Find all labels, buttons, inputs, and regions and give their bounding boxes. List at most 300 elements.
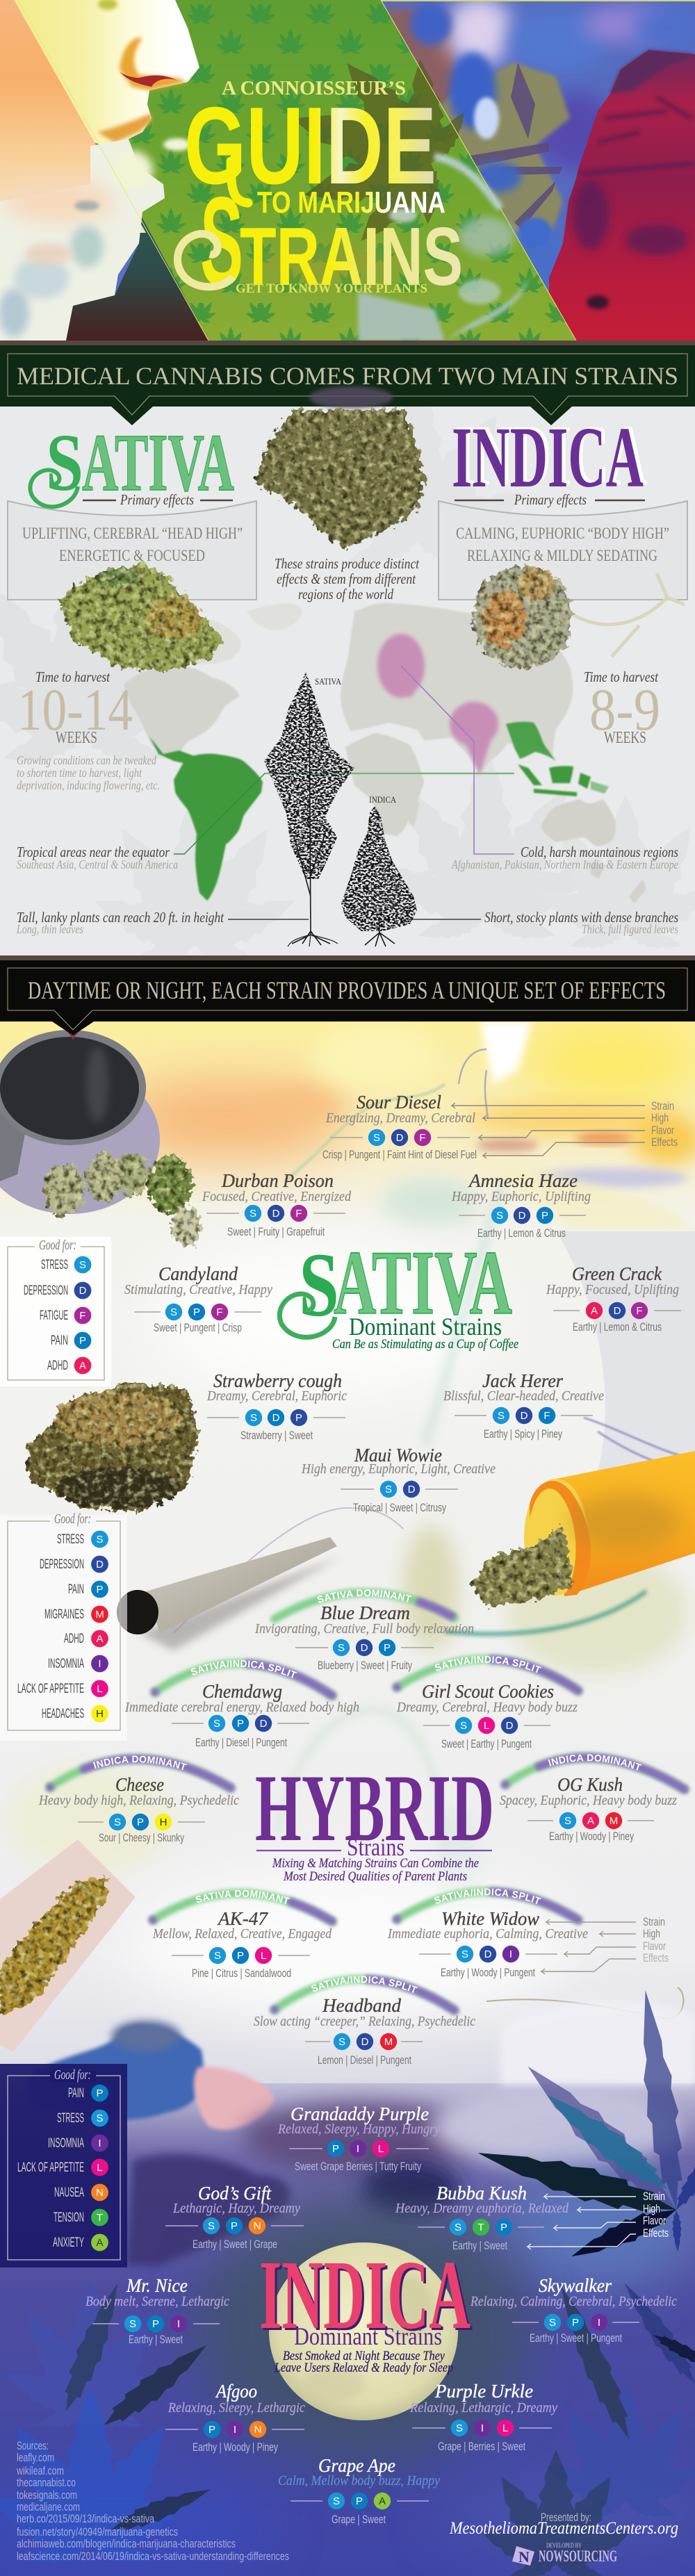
strain: Girl Scout Cookies: S (460, 1720, 467, 1732)
strain: Durban Poison: D (272, 1208, 280, 1220)
strain: AK-47: L (261, 1950, 266, 1962)
strain: Cheese: H (160, 1816, 167, 1828)
stat: indica time to harvest: 8-9 (589, 676, 660, 743)
key: indica good for: Good for: (54, 2067, 91, 2083)
strain: Grape Ape (278, 2455, 440, 2526)
strain: AK-47: AK-47 (217, 1908, 269, 1929)
map region: sativa green areas (149, 722, 609, 901)
photo: coffee cup with buds (0, 1030, 202, 1246)
strain: Blue Dream: S (338, 1642, 345, 1654)
strain: Headband: Lemon | Diesel | Pungent (318, 2053, 411, 2067)
text: growing conditions note: to shorten time to harvest, light (17, 766, 142, 780)
key: hybrid good for: STRESS (57, 1532, 84, 1547)
text: sources: fusion.net/story/40949/marijuana-genetics (17, 2525, 178, 2538)
stat: sativa time to harvest: WEEKS (56, 729, 97, 747)
strain: AK-47: S (214, 1950, 221, 1962)
logo: NowSourcing: DEVELOPED BY (546, 2542, 582, 2549)
key: sativa good for: Good for: (39, 1238, 76, 1253)
key: sativa good for: S (79, 1259, 86, 1271)
key: hybrid good for: HEADACHES (42, 1707, 84, 1721)
badge arc: sativa/indica split: SATIVA/INDICA SPLIT (190, 1660, 297, 1678)
strain: Grape Ape: P (356, 2495, 363, 2507)
strain: Bubba Kush: Earthy | Sweet (452, 2239, 507, 2252)
strain: Candyland (124, 1263, 272, 1334)
strain: Maui Wowie (301, 1445, 496, 1514)
label: sativa tree: SATIVA (315, 676, 342, 687)
strain: OG Kush: Earthy | Woody | Piney (549, 1830, 634, 1843)
strain: Purple Urkle: L (502, 2422, 508, 2434)
key: sativa good for: D (79, 1285, 87, 1297)
strain: AK-47: Mellow, Relaxed, Creative, Engaged (152, 1926, 332, 1942)
heading: hybrid strains: Mixing & Matching Strains Can Combine the (272, 1856, 479, 1871)
key: hybrid good for: H (96, 1708, 104, 1720)
strain: Headband: S (338, 2036, 345, 2048)
strain: Bubba Kush: Heavy, Dreamy euphoria, Relaxed (395, 2201, 569, 2216)
strain: Amnesia Haze: D (518, 1210, 526, 1222)
strain: Durban Poison: S (250, 1208, 256, 1220)
badge arc: sativa dominant (146, 1886, 339, 1929)
strain: Amnesia Haze: S (496, 1210, 503, 1222)
strain: Maui Wowie: High energy, Euphoric, Light, Creative (301, 1461, 496, 1477)
key: hybrid good for: Good for: (54, 1511, 91, 1527)
strain: God's Gift: P (231, 2220, 238, 2232)
key: indica good for: A (96, 2237, 104, 2249)
strain: Purple Urkle (409, 2381, 557, 2453)
key: sativa good for: FATIGUE (40, 1308, 68, 1323)
badge arc: sativa dominant: SATIVA DOMINANT (196, 1890, 290, 1904)
strain: OG Kush: A (587, 1815, 594, 1827)
photo: sativa bud (59, 563, 224, 671)
strain: Skywalker (470, 2275, 677, 2345)
strain: Green Crack: A (591, 1305, 598, 1317)
callout: sativa plant size (16, 909, 224, 936)
text: sources: thecannabist.co (17, 2476, 76, 2489)
strain: Strawberry cough: D (272, 1412, 280, 1424)
panel: indica primary effects: Primary effects (514, 491, 587, 508)
strain: Afgoo: I (234, 2424, 236, 2436)
callout: indica plant size (484, 909, 678, 936)
text: sources: herb.co/2015/09/13/indica-vs-sativa (17, 2512, 154, 2525)
strain: White Widow: Earthy | Woody | Pungent (441, 1966, 535, 1979)
panel: sativa primary effects (8, 491, 256, 600)
strain: Candyland: Sweet | Pungent | Crisp (154, 1321, 242, 1334)
strain: Maui Wowie: Tropical | Sweet | Citrusy (353, 1501, 446, 1514)
key: sativa good for: P (79, 1335, 86, 1347)
key: hybrid good for: P (96, 1584, 104, 1595)
strain: Blue Dream: Blue Dream (320, 1602, 410, 1623)
strain: Cheese: Cheese (115, 1774, 164, 1795)
key: indica good for: TENSION (54, 2210, 84, 2225)
credits: presented by (449, 2511, 678, 2538)
legend: hybrid strain key: High (643, 1927, 660, 1940)
text: sources: wikileaf.com (16, 2464, 64, 2477)
strain: Mr. Nice: Mr. Nice (126, 2275, 188, 2296)
text: sources: medicaljane.com (17, 2500, 80, 2513)
key: indica good for: L (97, 2162, 103, 2174)
hero title: A CONNOISSEUR’S (222, 77, 406, 99)
legend: indica strain key: Strain (643, 2190, 665, 2203)
key: hybrid good for: D (96, 1559, 104, 1570)
strain: Skywalker: Earthy | Sweet | Pungent (530, 2331, 622, 2345)
illustration: full moon (269, 2242, 458, 2420)
strain: OG Kush: M (610, 1815, 618, 1827)
strain: Candyland: Stimulating, Creative, Happy (124, 1282, 272, 1297)
strain: Chemdawg: D (260, 1718, 268, 1730)
strain: Sour Diesel: Crisp | Pungent | Faint Hint of Diesel Fuel (322, 1148, 477, 1161)
panel: sativa primary effects: UPLIFTING, CEREBRAL “HEAD HIGH” (22, 525, 243, 542)
badge arc: sativa/indica split (389, 1885, 585, 1928)
strain: Green Crack (546, 1263, 681, 1334)
label: indica tree: INDICA (369, 794, 397, 805)
strain: Chemdawg: Chemdawg (202, 1681, 282, 1702)
key: hybrid good for: M (95, 1609, 104, 1621)
strain: OG Kush: Spacey, Euphoric, Heavy body buzz (500, 1793, 677, 1808)
key: hybrid good for: MIGRAINES (44, 1607, 84, 1622)
text: sources: alchimiaweb.com/blogen/indica-marijuana-characteristics (17, 2537, 236, 2550)
strain: Strawberry cough (206, 1370, 347, 1442)
strain: Candyland: P (193, 1306, 200, 1318)
badge arc: sativa/indica split (147, 1657, 339, 1703)
strain: Grandaddy Purple: Sweet Grape Berries | Tutty Fruity (295, 2160, 421, 2173)
strain: White Widow: I (509, 1949, 512, 1960)
strain: White Widow: Immediate euphoria, Calming, Creative (387, 1926, 588, 1942)
strain: Jack Herer: S (498, 1410, 505, 1422)
strain: Maui Wowie: Maui Wowie (354, 1445, 442, 1466)
key: hybrid good for: LACK OF APPETITE (17, 1682, 84, 1696)
strain: Girl Scout Cookies: L (484, 1720, 489, 1732)
strain: Grandaddy Purple (277, 2103, 440, 2173)
key: indica good for: S (96, 2113, 104, 2124)
strain: Amnesia Haze: Earthy | Lemon & Citrus (477, 1227, 566, 1240)
strain: Sour Diesel (322, 1092, 477, 1161)
heading: sativa dominant strains: Dominant Strains (349, 1313, 502, 1340)
strain: Amnesia Haze (451, 1170, 591, 1240)
strain: Cheese: Heavy body high, Relaxing, Psychedelic (38, 1793, 239, 1808)
strain: Purple Urkle: Grape | Berries | Sweet (438, 2440, 525, 2453)
strain: Strawberry cough: S (250, 1412, 257, 1424)
strain: Durban Poison: Durban Poison (221, 1170, 334, 1191)
strain: Durban Poison: F (295, 1208, 302, 1220)
panel: sativa primary effects: Primary effects (120, 491, 194, 508)
strain: Purple Urkle: S (456, 2422, 463, 2434)
strain: Girl Scout Cookies: Dreamy, Cerebral, Heavy body buzz (396, 1700, 578, 1715)
photo: rolling paper with ground cannabis (0, 1839, 136, 2052)
text: growing conditions note: deprivation, inducing flowering, etc. (17, 778, 160, 792)
strain: Cheese (38, 1751, 239, 1844)
strain: Candyland: S (170, 1306, 177, 1318)
strain: Sour Diesel: Energizing, Dreamy, Cerebral (325, 1110, 475, 1126)
strain: White Widow: White Widow (441, 1908, 539, 1929)
strain: God's Gift: S (208, 2220, 215, 2232)
connector lines from map regions (174, 666, 514, 919)
strain: Maui Wowie: S (385, 1484, 392, 1495)
key: indica good for: N (96, 2187, 104, 2199)
heading: hybrid strains: Strains (347, 1833, 404, 1861)
strain: Grandaddy Purple: P (332, 2143, 339, 2155)
logo: NowSourcing: N (518, 2548, 530, 2566)
strain: Headband: M (384, 2036, 393, 2048)
text: growing conditions note: Growing conditions can be tweaked (17, 753, 157, 767)
strain: White Widow: D (484, 1949, 492, 1960)
badge arc: sativa/indica split (267, 1972, 461, 2018)
key: sativa good for: F (79, 1310, 86, 1322)
strain: Purple Urkle: I (481, 2422, 484, 2434)
key: indica good for: PAIN (68, 2086, 84, 2101)
banner: daytime or night effects (0, 955, 695, 1035)
heading: sativa dominant strains: S (299, 1233, 339, 1336)
strain: Strawberry cough: Dreamy, Cerebral, Euphoric (206, 1388, 347, 1404)
strain: AK-47 (146, 1886, 339, 1980)
callout: sativa plant size: Tall, lanky plants can reach 20 ft. in height (17, 909, 224, 926)
strain: Blue Dream: P (384, 1642, 391, 1654)
strain: Headband (254, 1972, 475, 2067)
text: sources: tokesignals.com (17, 2488, 77, 2502)
strain: Mr. Nice: P (152, 2318, 159, 2330)
decorative cannabis leaves (0, 1988, 695, 2576)
strain: AK-47: P (237, 1950, 244, 1962)
badge arc: sativa/indica split: SATIVA/INDICA SPLIT (434, 1889, 541, 1904)
photo: strawberry cough bud (28, 1381, 198, 1511)
strain: Strawberry cough: Strawberry | Sweet (240, 1429, 313, 1442)
strain: White Widow (387, 1885, 588, 1979)
key: indica good for: I (98, 2138, 101, 2149)
key: indica good for: P (96, 2087, 104, 2099)
text: sources (16, 2439, 289, 2563)
key: indica good for: T (97, 2212, 103, 2224)
heading: sativa: ATIVA (82, 417, 234, 508)
strain: Candyland: F (216, 1306, 223, 1318)
banner: medical cannabis comes from two main strains: MEDICAL CANNABIS COMES FROM TWO MAIN STRAINS (17, 362, 678, 390)
strain: Sour Diesel: S (373, 1132, 380, 1144)
legend: sativa strain key: Flavor (651, 1124, 674, 1137)
text: sources: leafly.com (17, 2451, 54, 2464)
background: indica night scene (0, 1988, 695, 2576)
legend: indica strain key: Flavor (643, 2214, 666, 2227)
strain: Mr. Nice: S (129, 2318, 136, 2330)
hero title (178, 77, 463, 312)
legend: sativa strain key (452, 1099, 678, 1158)
strain: Grape Ape: Grape | Sweet (332, 2513, 386, 2526)
heading: hybrid strains: Most Desired Qualities of Parent Plants (283, 1869, 467, 1884)
heading: indica dominant strains: Leave Users Relaxed & Ready for Sleep (274, 2361, 453, 2375)
strain: OG Kush: OG Kush (557, 1774, 623, 1795)
strain: Grape Ape: Calm, Mellow body buzz, Happy (278, 2473, 440, 2488)
strain: God's Gift: N (254, 2220, 261, 2232)
strain: Skywalker: P (572, 2317, 579, 2329)
text: strains intro: effects & stem from different (277, 571, 416, 587)
badge arc: indica dominant (43, 1751, 238, 1796)
key: sativa good for: ADHD (47, 1359, 68, 1373)
key: indica good for: NAUSEA (54, 2185, 84, 2200)
strain: Grandaddy Purple: I (357, 2143, 359, 2155)
strain: God's Gift: Earthy | Sweet | Grape (193, 2238, 277, 2251)
badge arc: sativa/indica split: SATIVA/INDICA SPLIT (311, 1976, 418, 1993)
text: growing conditions note (17, 753, 160, 792)
spilled buds (471, 1525, 573, 1607)
strain: Jack Herer: Jack Herer (482, 1370, 563, 1391)
strain: Jack Herer: Blissful, Clear-headed, Creative (443, 1388, 604, 1404)
hero title: TRAINS (240, 211, 463, 303)
strain: Afgoo (165, 2381, 305, 2454)
badge arc: indica dominant (498, 1750, 692, 1797)
key: sativa good for: DEPRESSION (24, 1283, 68, 1298)
legend: sativa strain key: Strain (651, 1099, 674, 1113)
heading: indica dominant strains: Dominant Strains (294, 2322, 442, 2350)
strain: Chemdawg (124, 1657, 359, 1749)
key: indica good for: INSOMNIA (48, 2136, 84, 2151)
legend: indica strain key (528, 2190, 669, 2249)
text: sources: Sources: (17, 2439, 49, 2452)
strain: Grandaddy Purple: Relaxed, Sleepy, Happy, Hungry (277, 2122, 440, 2137)
world map (124, 603, 646, 903)
photo: rolled joint (117, 1537, 341, 1650)
photo: pill bottle with spilled buds (471, 1451, 695, 1607)
strain: Strawberry cough: Strawberry cough (213, 1370, 342, 1391)
legend: indica strain key: Effects (643, 2226, 669, 2240)
badge arc: indica dominant: INDICA DOMINANT (93, 1755, 187, 1771)
strain: Chemdawg: S (213, 1718, 220, 1730)
panel: two main strains section background (0, 374, 695, 972)
strain: Green Crack: Happy, Focused, Uplifting (546, 1282, 679, 1297)
strain: Headband: D (361, 2036, 369, 2048)
strain: Skywalker: Skywalker (539, 2275, 612, 2296)
strain: Cheese: S (114, 1816, 121, 1828)
strain: Sour Diesel: D (396, 1132, 404, 1144)
hero title: S (200, 170, 243, 312)
hero green diagonal band (18, 0, 576, 341)
strain: Girl Scout Cookies: Sweet | Earthy | Pungent (441, 1737, 532, 1750)
heading: indica dominant strains: Best Smoked at Night Because They (283, 2349, 445, 2363)
strain: Afgoo: P (208, 2424, 215, 2436)
stat: indica time to harvest: Time to harvest (584, 668, 659, 685)
key: hybrid good for (0, 1511, 127, 1741)
strain: Mr. Nice: Earthy | Sweet (129, 2333, 183, 2346)
heading: sativa dominant strains: Can Be as Stimulating as a Cup of Coffee (332, 1337, 518, 1352)
sativa tree illustration (264, 672, 354, 946)
strain: Blue Dream: Invigorating, Creative, Full body relaxation (254, 1621, 474, 1636)
heading: hybrid strains (255, 1755, 494, 1884)
hero diagonal edges (18, 0, 576, 341)
strain: Purple Urkle: Relaxing, Lethargic, Dreamy (409, 2400, 557, 2415)
strain: Grandaddy Purple: L (378, 2143, 384, 2155)
strain: Chemdawg: Earthy | Diesel | Pungent (195, 1736, 287, 1749)
key: hybrid good for: DEPRESSION (40, 1557, 84, 1572)
legend: hybrid strain key: Effects (643, 1951, 669, 1964)
strain: Girl Scout Cookies: D (506, 1720, 514, 1732)
hero title: GUIDE (184, 85, 436, 207)
strain: Grandaddy Purple: Grandaddy Purple (291, 2103, 429, 2124)
strain: Mr. Nice: Body melt, Serene, Lethargic (85, 2294, 229, 2309)
logo: NowSourcing: NOWSOURCING (539, 2548, 617, 2565)
strain: Jack Herer: F (543, 1410, 550, 1422)
heading: sativa dominant strains (279, 1231, 518, 1352)
key: hybrid good for: I (98, 1658, 101, 1670)
badge arc: sativa dominant (268, 1586, 461, 1626)
coffee cup buds (43, 1152, 202, 1246)
legend: hybrid strain key: Strain (643, 1915, 665, 1928)
strain: White Widow: S (461, 1949, 468, 1960)
credits: presented by: Presented by: (541, 2511, 591, 2524)
text: sources: leafscience.com/2014/06/19/indica-vs-sativa-understanding-differences (17, 2550, 289, 2563)
strain: Bubba Kush: S (455, 2222, 461, 2233)
key: indica good for: LACK OF APPETITE (17, 2160, 84, 2175)
heading: sativa: S (46, 417, 83, 508)
strain: Bubba Kush (395, 2183, 569, 2252)
legend: indica strain key: High (643, 2202, 660, 2215)
photo: center cannabis buds (256, 410, 425, 550)
strain: Jack Herer: D (521, 1410, 528, 1422)
strain: Green Crack: Green Crack (572, 1263, 662, 1284)
strain: Afgoo: Relaxing, Sleepy, Lethargic (167, 2400, 305, 2415)
strain: God's Gift: God’s Gift (198, 2183, 272, 2204)
strain: Durban Poison: Sweet | Fruity | Grapefruit (227, 1225, 325, 1238)
strain: Headband: Slow acting “creeper,” Relaxing, Psychedelic (254, 2014, 475, 2029)
text: strains intro: regions of the world (298, 586, 393, 602)
text: strains intro (275, 555, 420, 602)
badge arc: sativa/indica split (389, 1652, 585, 1698)
strain: Grape Ape: Grape Ape (318, 2455, 395, 2476)
strain: Jack Herer (443, 1370, 604, 1441)
hero beard shadow (66, 212, 208, 341)
panel: hero banner (0, 0, 695, 341)
hero title: TO MARIJUANA (257, 186, 445, 220)
strain: Sour Diesel: Sour Diesel (357, 1092, 441, 1113)
strain: Afgoo: Earthy | Woody | Piney (193, 2440, 278, 2454)
heading: hybrid strains: HYBRID (255, 1755, 494, 1861)
key: hybrid good for: L (97, 1683, 103, 1695)
panel: sativa primary effects: ENERGETIC & FOCUSED (59, 547, 205, 564)
strain: God's Gift (165, 2183, 304, 2251)
strain: Green Crack: F (636, 1305, 643, 1317)
key: hybrid good for: A (96, 1633, 104, 1645)
hero photo: exhaled smoke (0, 138, 191, 341)
strain: Cheese: Sour | Cheesy | Skunky (99, 1831, 184, 1844)
legend: sativa strain key: High (651, 1111, 669, 1124)
strain: Girl Scout Cookies (389, 1652, 585, 1750)
strain: Girl Scout Cookies: Girl Scout Cookies (422, 1681, 554, 1702)
callout: mountainous regions (451, 844, 678, 871)
strain: Headband: Headband (322, 1995, 402, 2016)
legend: hybrid strain key: Flavor (643, 1939, 666, 1953)
strain: Blue Dream: D (361, 1642, 368, 1654)
hero title: GET TO KNOW YOUR PLANTS (236, 281, 427, 296)
strain: Jack Herer: Earthy | Spicy | Piney (484, 1427, 562, 1441)
strain: Grape Ape: A (379, 2495, 386, 2507)
heading: indica dominant strains (259, 2240, 473, 2375)
heading: sativa dominant strains: ATIVA (334, 1231, 512, 1334)
strain: Mr. Nice (85, 2275, 229, 2346)
key: sativa good for: A (79, 1360, 86, 1372)
strain: Bubba Kush: T (477, 2222, 484, 2233)
strain: Grape Ape: S (333, 2495, 340, 2507)
strain: OG Kush: S (564, 1815, 571, 1827)
strain: Amnesia Haze: Happy, Euphoric, Uplifting (451, 1189, 591, 1204)
key: indica good for: ANXIETY (53, 2235, 84, 2250)
strain: Durban Poison (202, 1170, 352, 1238)
strain: OG Kush (498, 1750, 692, 1843)
strain: Purple Urkle: Purple Urkle (434, 2381, 533, 2402)
strain: Bubba Kush: P (500, 2222, 507, 2233)
badge arc: indica dominant: INDICA DOMINANT (548, 1754, 642, 1771)
text: strains intro: These strains produce distinct (275, 555, 420, 572)
strain: Blue Dream (254, 1586, 474, 1672)
strain: Sour Diesel: F (419, 1132, 426, 1144)
logo: NowSourcing (512, 2542, 617, 2566)
key: indica good for: STRESS (57, 2111, 84, 2126)
indica tree illustration (341, 794, 417, 946)
strain: God's Gift: Lethargic, Hazy, Dreamy (172, 2201, 300, 2216)
stat: sativa time to harvest: 10-14 (17, 676, 133, 743)
